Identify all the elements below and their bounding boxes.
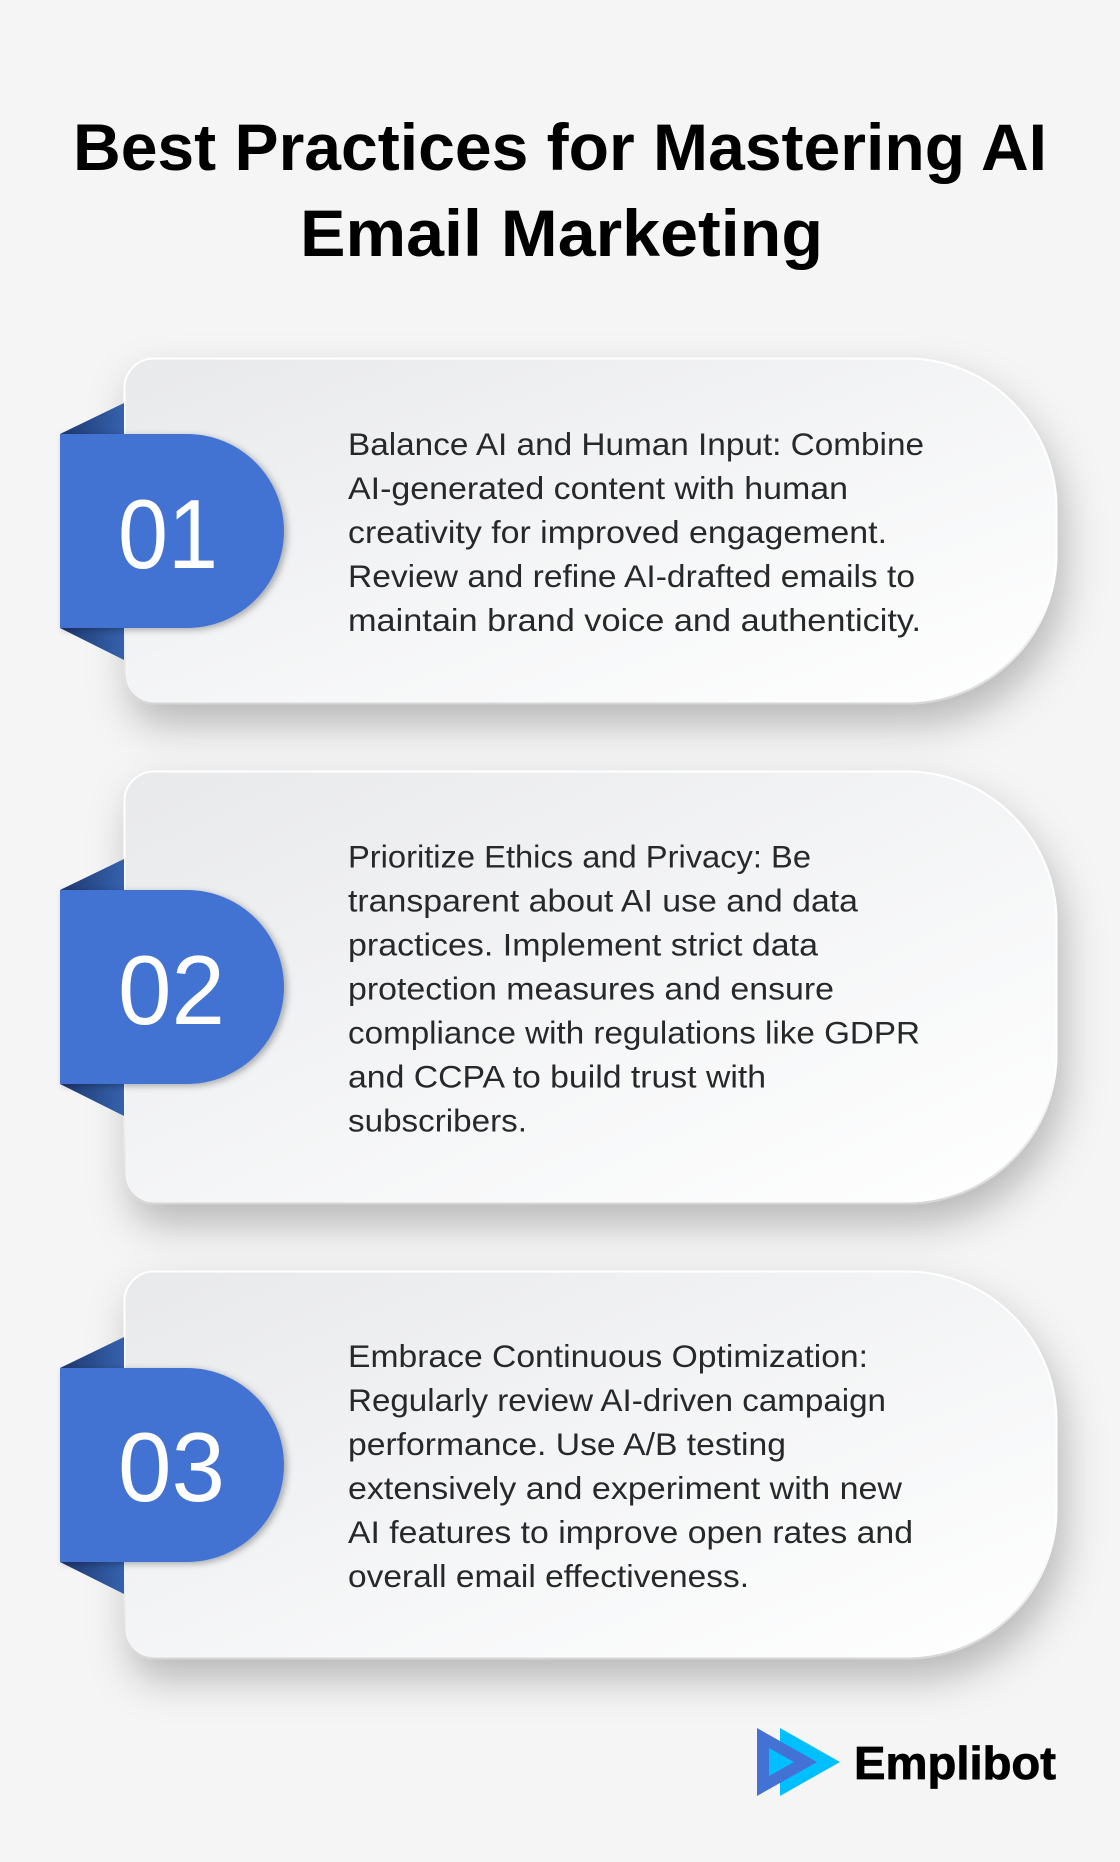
wordmark: Emplibot — [854, 1737, 1056, 1789]
badge 3 — [60, 1368, 284, 1562]
number 01: 01 — [118, 479, 218, 589]
badge 1 fold bottom — [60, 628, 124, 660]
title: Best Practices for Mastering AI — [73, 110, 1047, 184]
panel: step 3 — [60, 1271, 1057, 1659]
text block 3: Embrace Continuous Optimization: — [348, 1338, 868, 1374]
text block 2: transparent about AI use and data — [348, 882, 859, 918]
text block 1: AI-generated content with human — [348, 470, 848, 506]
text block 2: and CCPA to build trust with — [348, 1058, 766, 1094]
number 02: 02 — [118, 935, 225, 1045]
text block 1: Review and refine AI-drafted emails to — [348, 558, 915, 594]
badge 3 fold bottom — [60, 1562, 124, 1594]
logo: Emplibot — [757, 1728, 1056, 1796]
badge 2 fold top — [60, 859, 124, 890]
text block 3: extensively and experiment with new — [348, 1470, 902, 1506]
icon: play triangles — [757, 1728, 840, 1796]
panel: step 1 — [60, 358, 1057, 704]
text block 2: Prioritize Ethics and Privacy: Be — [348, 838, 811, 874]
badge 2 fold bottom — [60, 1084, 124, 1116]
text block 2: compliance with regulations like GDPR — [348, 1014, 920, 1050]
text block 2: subscribers. — [348, 1102, 527, 1138]
card 1 background — [124, 358, 1057, 704]
text block 3: Regularly review AI-driven campaign — [348, 1382, 886, 1418]
text block 1: maintain brand voice and authenticity. — [348, 602, 921, 638]
text block 3: overall email effectiveness. — [348, 1558, 749, 1594]
text block 1: creativity for improved engagement. — [348, 514, 887, 550]
badge 1 — [60, 434, 284, 628]
badge 1 fold top — [60, 403, 124, 434]
text block 2 — [348, 838, 920, 1138]
title — [73, 110, 1047, 270]
text block 3: AI features to improve open rates and — [348, 1514, 913, 1550]
title: Email Marketing — [300, 196, 823, 270]
text block 1 — [348, 426, 924, 638]
panel: step 2 — [60, 771, 1057, 1204]
badge 2 — [60, 890, 284, 1084]
number 03: 03 — [118, 1412, 225, 1522]
text block 1: Balance AI and Human Input: Combine — [348, 426, 924, 462]
text block 3 — [348, 1338, 913, 1594]
text block 2: practices. Implement strict data — [348, 926, 819, 962]
card 3 background — [124, 1271, 1057, 1659]
text block 3: performance. Use A/B testing — [348, 1426, 786, 1462]
text block 2: protection measures and ensure — [348, 970, 834, 1006]
badge 3 fold top — [60, 1337, 124, 1368]
card 2 background — [124, 771, 1057, 1204]
